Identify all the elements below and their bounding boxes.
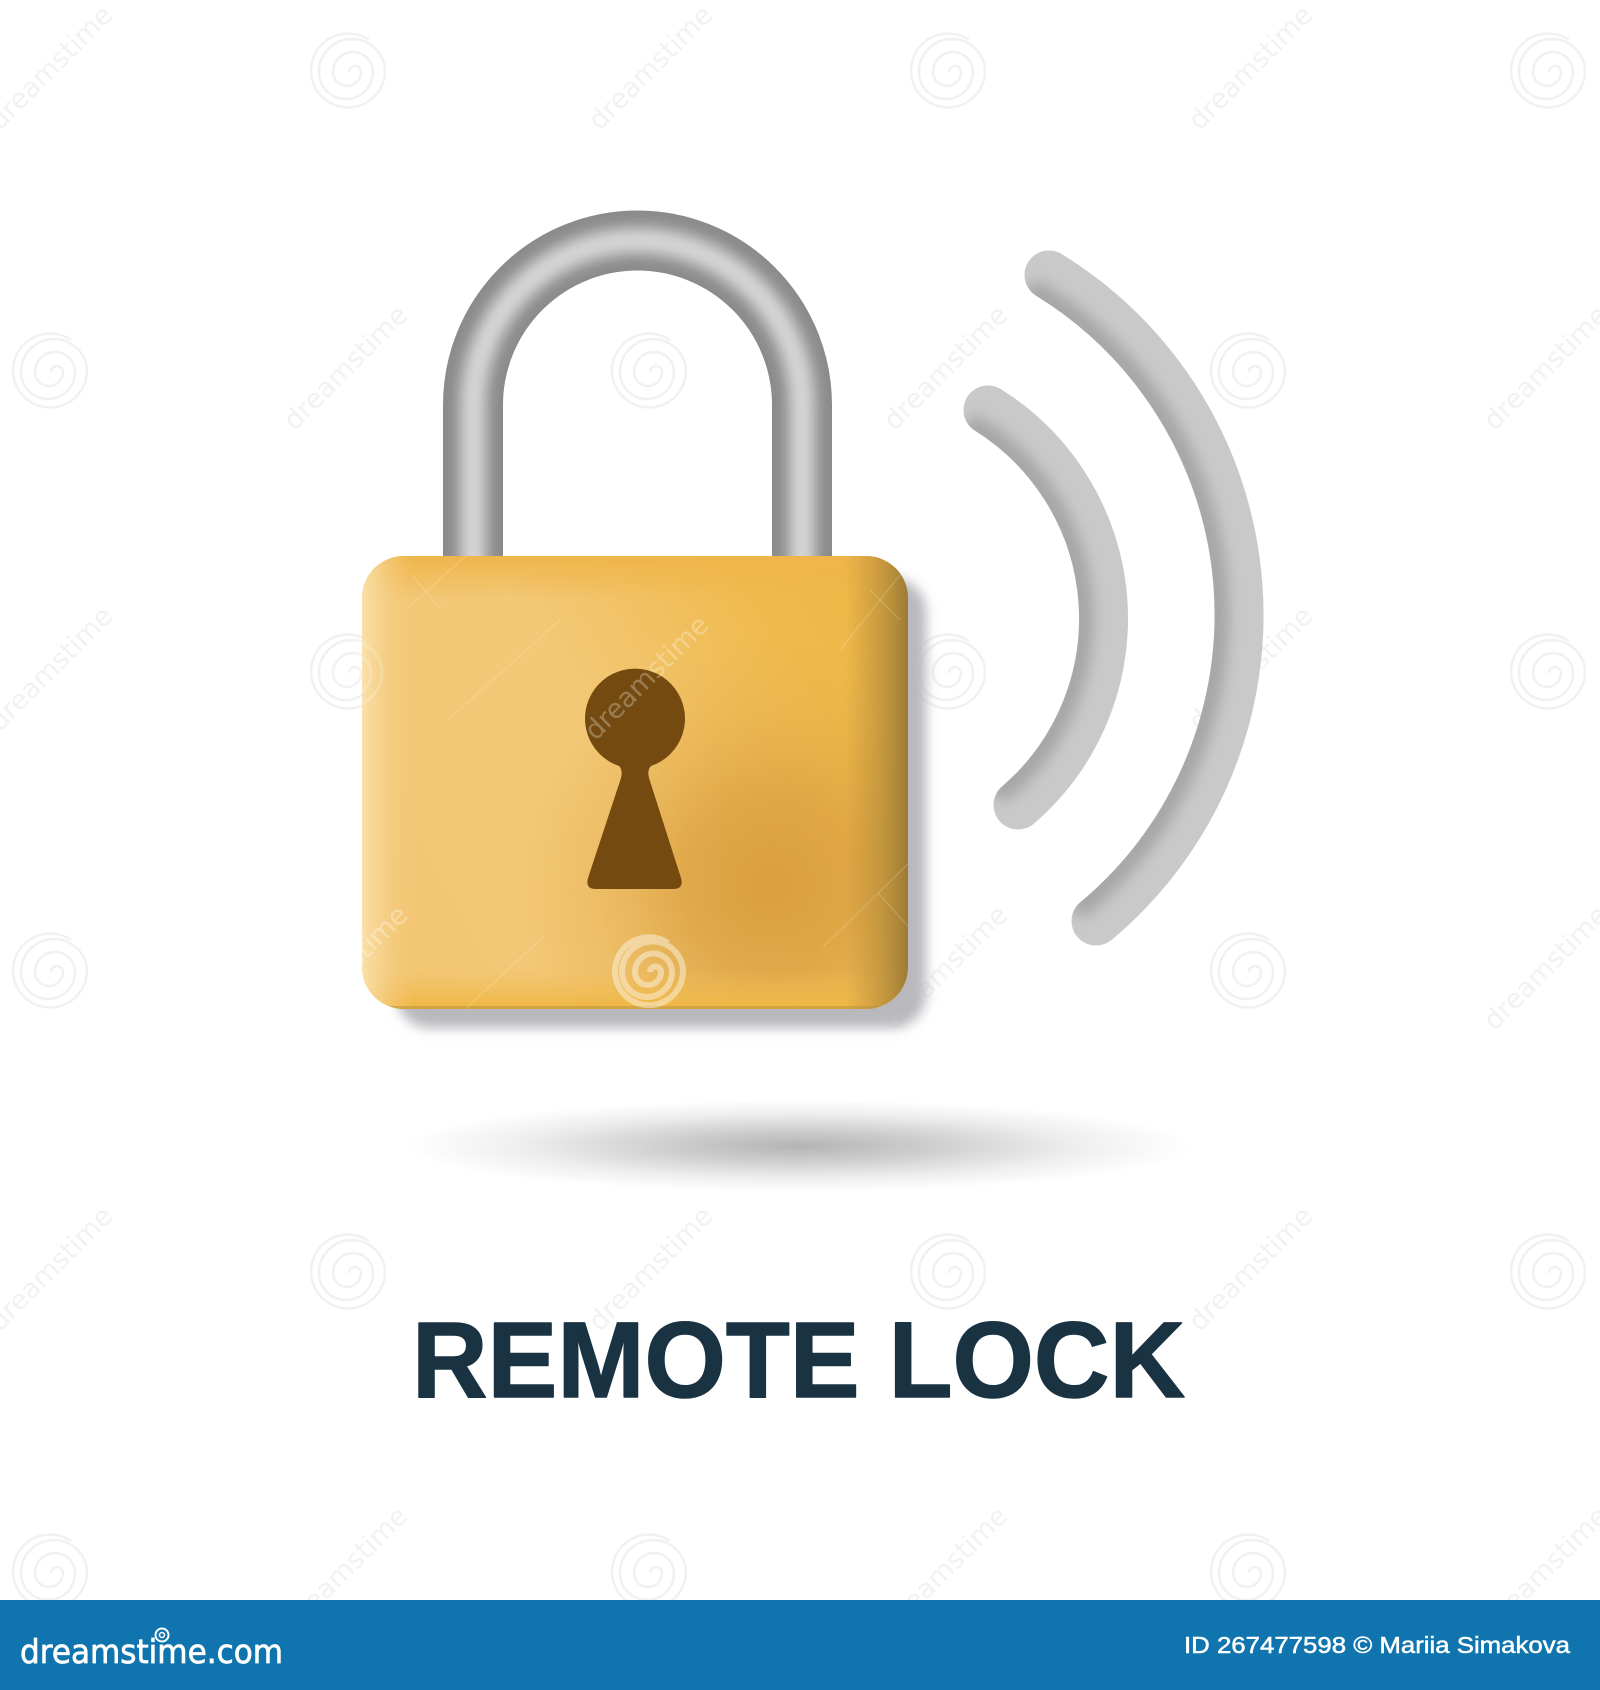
footer credit: ID 267477598 © Mariia Simakova [1184,1632,1570,1658]
watermark pattern: dreamstime [1183,601,1319,737]
watermark pattern: dreamstime [878,1501,1014,1637]
footer band [0,1600,1600,1690]
watermark pattern: dreamstime [278,1501,414,1637]
watermark pattern: dreamstime [583,0,719,136]
watermark on lock body: dreamstime [579,610,715,746]
watermark pattern: dreamstime [583,1201,719,1337]
small wave [964,386,1128,830]
watermark pattern: dreamstime [1183,1201,1319,1337]
floor shadow [405,1100,1191,1192]
watermark on lock body [278,610,715,1036]
icon: signal waves [964,250,1264,946]
icon: padlock [362,210,933,1035]
lock body [362,552,925,1030]
watermark on lock body: dreamstime [278,900,414,1036]
lock drop shadow [396,578,926,1028]
footer logo: dreamstime.com: dreamstime.com [20,1632,283,1671]
title: REMOTE LOCK [412,1299,1185,1420]
lock shackle [443,210,832,556]
watermark pattern: dreamstime [1183,0,1319,136]
keyhole [585,669,685,889]
large wave [1024,250,1264,946]
watermark pattern: dreamstime [878,900,1014,1036]
watermark pattern: dreamstime [278,300,414,436]
watermark pattern: dreamstime [878,300,1014,436]
